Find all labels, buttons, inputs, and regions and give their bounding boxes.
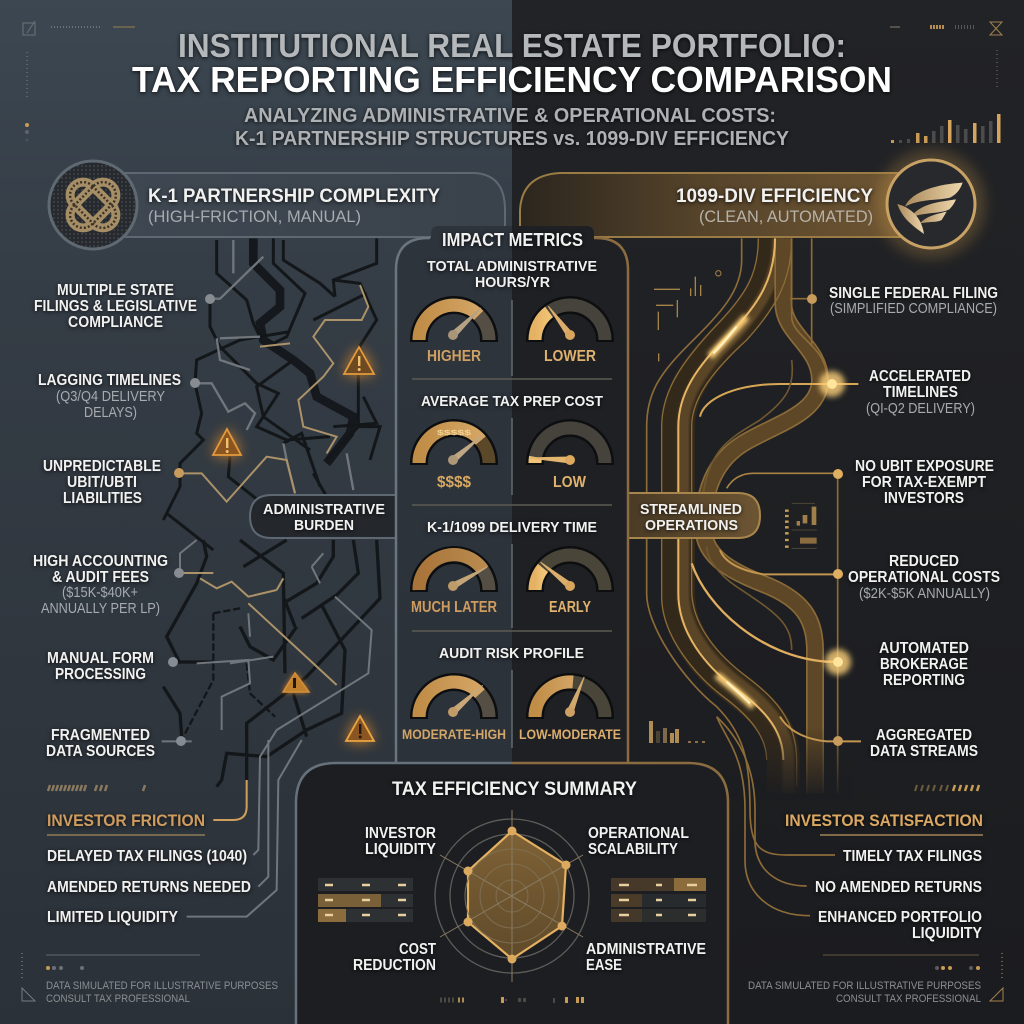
label: no ubit exposure: NO UBIT EXPOSURE: [855, 458, 994, 475]
label: fragmented data sources: FRAGMENTED: [51, 727, 150, 744]
bright core line: [678, 238, 783, 760]
gauge: 1099 audit low-moderate: [535, 675, 605, 719]
subheading: (HIGH-FRICTION, MANUAL): [148, 207, 361, 226]
radar label: administrative ease: ADMINISTRATIVE: [586, 941, 706, 958]
label: no ubit exposure: INVESTORS: [884, 490, 964, 507]
list of satisfaction effects: NO AMENDED RETURNS: [815, 879, 982, 896]
label: high accounting fees: & AUDIT FEES: [52, 569, 149, 586]
metric: audit risk profile: MODERATE-HIGH: [402, 726, 506, 742]
metric: audit risk profile: AUDIT RISK PROFILE: [439, 645, 584, 662]
mini table left: [318, 878, 413, 922]
metric: total administrative hours: TOTAL ADMINISTRATIVE: [427, 258, 597, 275]
panel: tax efficiency summary: [296, 763, 728, 1024]
label: multiple state filings: FILINGS & LEGISLATIVE: [34, 298, 197, 315]
mini bar chart top right: [891, 114, 1000, 143]
mini bar chart lower right: [649, 721, 705, 743]
panel: investor satisfaction: [785, 785, 983, 942]
label: single federal filing: [807, 285, 998, 317]
label: lagging timelines: DELAYS): [84, 405, 137, 421]
mini table right: [611, 878, 706, 922]
label: high accounting fees: ANNUALLY PER LP): [41, 601, 160, 617]
pill: administrative burden: BURDEN: [294, 518, 354, 534]
label: manual form processing: MANUAL FORM: [47, 650, 154, 667]
list of satisfaction effects: ENHANCED PORTFOLIO: [818, 909, 982, 926]
label: unpredictable liabilities: LIABILITIES: [63, 490, 142, 507]
heading: IMPACT METRICS: [442, 230, 583, 250]
icon: warning triangle lower right: [346, 716, 374, 741]
label: reduced operational costs: REDUCED: [889, 553, 959, 570]
label: unpredictable liabilities: UBIT/UBTI: [67, 474, 137, 491]
label: automated brokerage reporting: AUTOMATED: [879, 640, 969, 657]
label: fragmented data sources: [46, 727, 186, 760]
radar label: operational scalability: SCALABILITY: [588, 841, 679, 858]
icon: warning triangle left: [213, 429, 241, 455]
gauge: k-1 cost high: $$$$$: [437, 430, 471, 437]
main band edges: [662, 238, 767, 760]
radar label: investor liquidity: [365, 825, 437, 858]
heading: TAX EFFICIENCY SUMMARY: [392, 779, 637, 800]
radar label: investor liquidity: LIQUIDITY: [365, 841, 437, 858]
metric: delivery time: [411, 519, 605, 616]
label: high accounting fees: ($15K-$40K+: [62, 585, 138, 601]
subtitle: ANALYZING ADMINISTRATIVE & OPERATIONAL COSTS:: [244, 104, 776, 127]
data pips: [440, 997, 584, 1003]
radar label: cost reduction: [353, 941, 436, 974]
icon: wing badge: [877, 150, 985, 258]
metric: average tax prep cost: $$$$: [437, 474, 471, 491]
metric: total administrative hours: HOURS/YR: [475, 274, 550, 291]
panel: investor friction: [47, 785, 251, 926]
connector curves to the label dots: [727, 473, 838, 488]
top corner decorations: [23, 21, 1002, 142]
metric: total administrative hours: HIGHER: [427, 348, 481, 365]
metric: total administrative hours: LOWER: [544, 348, 596, 365]
label: aggregated data streams: DATA STREAMS: [870, 743, 978, 760]
list of friction effects: [47, 848, 251, 926]
heading: K-1 PARTNERSHIP COMPLEXITY: [148, 185, 440, 207]
metric: average tax prep cost: [419, 393, 605, 491]
metric: average tax prep cost: AVERAGE TAX PREP COST: [421, 393, 603, 410]
gauge: k-1 hours higher: [419, 305, 489, 342]
label: aggregated data streams: AGGREGATED: [876, 727, 972, 744]
list of friction effects: AMENDED RETURNS NEEDED: [47, 879, 251, 896]
icon: warning triangle small: [283, 673, 309, 692]
list of satisfaction effects: TIMELY TAX FILINGS: [843, 848, 982, 865]
metric: audit risk profile: [402, 645, 621, 742]
list of satisfaction effects: LIQUIDITY: [912, 925, 983, 942]
footnote left: CONSULT TAX PROFESSIONAL: [46, 993, 190, 1005]
label: automated brokerage reporting: REPORTING: [883, 672, 965, 689]
label: reduced operational costs: ($2K-$5K ANNUALLY): [859, 586, 990, 602]
gauge: k-1 audit moderate-high: [419, 682, 489, 719]
gauge: 1099 cost low: [529, 428, 605, 465]
glows: [757, 240, 793, 270]
radar label: operational scalability: [588, 825, 689, 858]
streamlined golden flow lines: 1099-DIV: [647, 238, 861, 916]
list of friction effects: LIMITED LIQUIDITY: [47, 909, 179, 926]
label: automated brokerage reporting: BROKERAGE: [880, 656, 968, 673]
list of satisfaction effects: [815, 848, 983, 942]
label: no ubit exposure: FOR TAX-EXEMPT: [862, 474, 986, 491]
label: no ubit exposure: [833, 458, 994, 507]
label: single federal filing: (SIMPLIFIED COMPLIANCE): [830, 301, 997, 317]
label: single federal filing: SINGLE FEDERAL FILING: [829, 285, 998, 302]
label: high accounting fees: HIGH ACCOUNTING: [33, 553, 168, 570]
network of tangled lines: K-1 complexity: [162, 238, 380, 917]
label: lagging timelines: LAGGING TIMELINES: [38, 372, 181, 389]
footnote right: DATA SIMULATED FOR ILLUSTRATIVE PURPOSES: [748, 980, 981, 992]
radar label: administrative ease: EASE: [586, 957, 622, 974]
label: reduced operational costs: [833, 553, 1000, 602]
outer fine lines: [647, 238, 835, 855]
metric: total administrative hours: [419, 258, 605, 365]
label: aggregated data streams: [833, 727, 978, 760]
metric: delivery time: EARLY: [549, 599, 592, 616]
gauge: 1099 delivery early: [535, 555, 605, 592]
footnote right: CONSULT TAX PROFESSIONAL: [836, 993, 981, 1005]
radar chart: [435, 810, 589, 982]
wide secondary band: [703, 238, 820, 793]
title: INSTITUTIONAL REAL ESTATE PORTFOLIO:: [178, 27, 846, 64]
radar label: cost reduction: REDUCTION: [353, 957, 436, 974]
label: unpredictable liabilities: UNPREDICTABLE: [43, 458, 161, 475]
subtitle: [235, 104, 789, 150]
title: [132, 27, 892, 100]
vertical connector lines: [790, 238, 838, 793]
metric: delivery time: K-1/1099 DELIVERY TIME: [427, 519, 597, 536]
label: lagging timelines: [38, 372, 200, 421]
pill: administrative burden: ADMINISTRATIVE: [263, 502, 385, 518]
label: fragmented data sources: DATA SOURCES: [46, 743, 155, 760]
icon: warning triangle upper right: [344, 347, 374, 374]
pill: administrative burden: [250, 495, 396, 538]
metric: average tax prep cost: LOW: [553, 474, 586, 491]
label: manual form processing: [47, 650, 178, 683]
heading: 1099-DIV EFFICIENCY: [676, 185, 873, 207]
footnote left: [22, 953, 278, 1005]
radar label: cost reduction: COST: [399, 941, 436, 958]
list of friction effects: DELAYED TAX FILINGS (1040): [47, 848, 247, 865]
label: multiple state filings: [34, 282, 215, 331]
radar label: investor liquidity: INVESTOR: [365, 825, 436, 842]
heading: INVESTOR FRICTION: [47, 811, 205, 830]
label: accelerated timelines: (QI-Q2 DELIVERY): [866, 401, 975, 417]
label: lagging timelines: (Q3/Q4 DELIVERY: [56, 389, 165, 405]
panel: 1099-DIV header: [520, 150, 985, 258]
subtitle: K-1 PARTNERSHIP STRUCTURES vs. 1099-DIV EFFICIENCY: [235, 127, 789, 150]
radar label: administrative ease: [586, 941, 706, 974]
gauge: k-1 delivery much later: [419, 555, 489, 592]
right labels: [807, 285, 1000, 760]
label: accelerated timelines: [819, 368, 975, 417]
small flow decorations: [654, 271, 817, 548]
icon: celtic knot badge: [49, 161, 137, 249]
subheading: (CLEAN, AUTOMATED): [699, 207, 873, 226]
label: unpredictable liabilities: [43, 458, 184, 507]
pill: streamlined operations: OPERATIONS: [645, 518, 738, 534]
warning icons: [213, 347, 374, 741]
pill: streamlined operations: STREAMLINED: [640, 502, 742, 518]
panel: impact metrics: [396, 226, 628, 770]
wide main band: [678, 238, 783, 793]
title: TAX REPORTING EFFICIENCY COMPARISON: [132, 59, 892, 100]
label: multiple state filings: MULTIPLE STATE: [57, 282, 174, 299]
pill: streamlined operations: [628, 493, 760, 538]
label: automated brokerage reporting: [825, 640, 969, 689]
gauge: 1099 hours lower: [535, 304, 605, 342]
gauge: k-1 cost high: [419, 428, 489, 465]
metric: delivery time: MUCH LATER: [411, 599, 497, 616]
footnote right: [748, 953, 1003, 1005]
radar label: operational scalability: OPERATIONAL: [588, 825, 689, 842]
metric: audit risk profile: LOW-MODERATE: [519, 726, 621, 742]
label: manual form processing: PROCESSING: [55, 666, 146, 683]
panel: k-1 partnership header: [49, 161, 505, 249]
left labels: [33, 282, 215, 760]
label: reduced operational costs: OPERATIONAL COSTS: [848, 569, 1000, 586]
label: high accounting fees: [33, 553, 184, 617]
label: accelerated timelines: TIMELINES: [883, 384, 958, 401]
label: multiple state filings: COMPLIANCE: [68, 314, 163, 331]
footnote left: DATA SIMULATED FOR ILLUSTRATIVE PURPOSES: [46, 980, 278, 992]
label: accelerated timelines: ACCELERATED: [869, 368, 971, 385]
heading: INVESTOR SATISFACTION: [785, 811, 983, 830]
